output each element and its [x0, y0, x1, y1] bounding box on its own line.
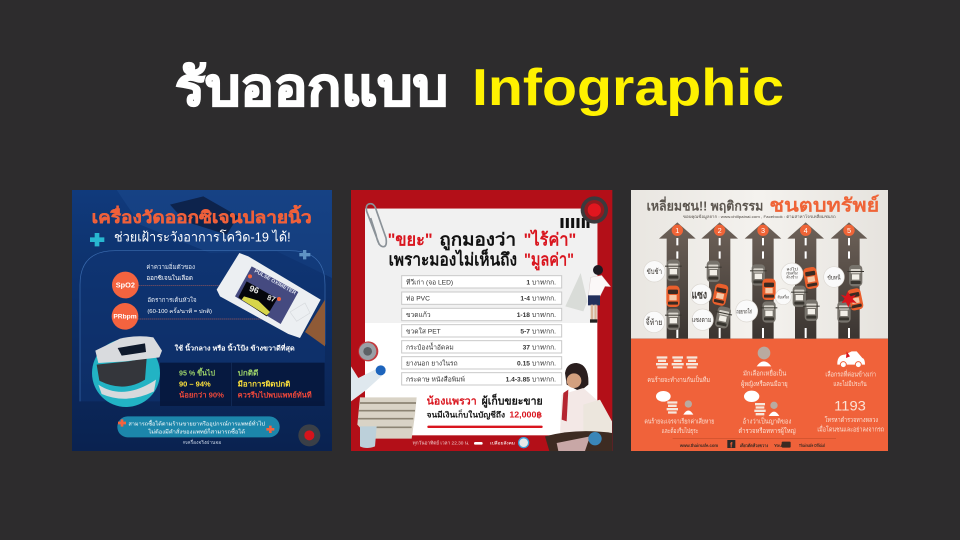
panel heading: "ขยะ" — [388, 229, 433, 249]
callout: PRbpm: อัตราการเต้นหัวใจ — [147, 296, 197, 304]
icon: paperclip — [366, 204, 386, 247]
text: choose women or elderly — [741, 369, 788, 388]
callout: girl saving: น้องแพรวา — [427, 395, 477, 408]
text: claims relatives: อ้างว่าเป็นญาติของ — [743, 417, 791, 426]
callout: girl saving: 12,000฿ — [509, 410, 542, 419]
footer: credits: f — [730, 440, 733, 449]
illustration: boy with trash bag — [565, 265, 611, 323]
background hand photo — [117, 190, 332, 278]
panel heading — [647, 194, 879, 220]
panel heading: เครื่องวัดออกซิเจนปลายนิ้ว — [92, 205, 312, 227]
icon: bubble with officer — [744, 391, 779, 416]
callout: PRbpm: PRbpm — [113, 314, 137, 321]
table: oxygen levels: ควรรีบไปพบแพทย์ทันที — [238, 391, 312, 400]
bubble labels: จี้ท้าย — [645, 316, 662, 327]
table: recycling prices: ทีวีเก่า (จอ LED) — [406, 278, 453, 286]
footer: credits — [673, 438, 836, 449]
illustration: girl collecting — [545, 363, 612, 451]
icon: pulse oximeter small with teal circle — [92, 336, 162, 407]
callout: girl saving — [427, 394, 543, 428]
callout: SpO2: SpO2 — [116, 281, 135, 290]
panel: pulse oximeter infographic — [72, 190, 332, 451]
note pill: สามารถซื้อได้ตามร้านขายยาหรืออุปกรณ์การแพทย์ทั่วไป — [128, 419, 266, 427]
icon group: three people — [656, 356, 698, 368]
text: demand compensation: และต้องรีบไปธุระ — [662, 427, 698, 435]
bubble labels — [645, 266, 841, 327]
table: recycling prices: 0.15 บาท/กก. — [517, 360, 556, 367]
text: usage: ใช้ นิ้วกลาง หรือ นิ้วโป้ง ข้างขวาดีที่สุด — [175, 342, 295, 352]
table: recycling prices: 5-7 บาท/กก. — [520, 328, 556, 335]
table: recycling prices: 1 บาท/กก. — [526, 279, 556, 286]
bubble labels: ลงไป — [786, 266, 798, 271]
bubble labels: แซง — [692, 290, 707, 302]
bubble labels: ดับเครื่อง — [778, 294, 789, 300]
hashtag: #เครื่องจริงผ่านจอ — [183, 439, 221, 446]
footer: broadcast info: ทุกวันอาทิตย์ เวลา 22.30 น. — [413, 440, 469, 447]
footer: broadcast info — [413, 438, 529, 448]
icon: pulse oximeter large — [217, 253, 321, 338]
text: demand compensation: คนร้ายจะเจรจาเรียกค่าเสียหาย — [644, 418, 714, 426]
illustration: newspaper stack — [357, 397, 417, 448]
note pill — [117, 416, 280, 437]
table: recycling prices: กระดาษ หนังสือพิมพ์ — [406, 375, 465, 383]
panel: waste value infographic — [351, 190, 612, 451]
bubble labels: เช่นเครื่อง — [786, 270, 798, 275]
footer: credits: www.thairsafe.com — [679, 443, 718, 448]
text: call highway police: เมื่อโดนชนและอย่าลงจากรถ — [817, 424, 884, 433]
footer: broadcast info: เปลือยสังคม — [490, 441, 515, 446]
arrow road 3: 3 — [761, 226, 765, 235]
arrow road 4 — [787, 222, 824, 339]
arrow road 2 — [701, 222, 738, 339]
panel heading: "ไร้ค่า" — [524, 228, 576, 249]
panel heading: ขอบคุณข้อมูลจาก : www.chillpainai.com , Facebook : ตามล่าหาโจรเหลี่ยมชนรถ — [683, 214, 836, 220]
text: call highway police — [817, 416, 884, 433]
bubble labels: แซงตาม — [692, 317, 711, 324]
panel heading — [92, 205, 312, 244]
text: choose old uninsured car: และไม่มีประกัน — [833, 380, 867, 388]
speech bubbles — [643, 261, 844, 333]
bubble labels: ค้างข้าง — [786, 274, 798, 279]
text: claims relatives — [738, 417, 796, 435]
table: recycling prices: ท่อ PVC — [406, 296, 430, 303]
panel heading: ถูกมองว่า — [439, 229, 516, 251]
arrow road 2: 2 — [718, 226, 722, 235]
table: oxygen levels: ปกติดี — [238, 369, 259, 378]
icon: plus — [90, 233, 104, 246]
title: รับออกแบบ — [175, 59, 448, 117]
icon: bubble with people — [656, 391, 693, 415]
callout: SpO2: ออกซิเจนในเลือด — [146, 274, 193, 282]
table: oxygen levels: 95 % ขึ้นไป — [179, 367, 215, 378]
icon: record button — [562, 196, 608, 228]
panel heading: "มูลค่า" — [524, 250, 574, 272]
footer: credits: เดียวตัดห้วยขวาง — [740, 442, 768, 448]
table: recycling prices: ขวดใส PET — [406, 327, 441, 335]
title — [175, 59, 784, 117]
text: works as a team: คนร้ายจะทำงานกันเป็นทีม — [647, 375, 710, 384]
text: call highway police: โทรหาตำรวจทางหลวง — [825, 416, 878, 424]
table: recycling prices: กระป๋องน้ำอัดลม — [406, 342, 454, 351]
icon: crash burst — [841, 291, 857, 307]
icon: small plus — [299, 250, 310, 259]
number: 1193: 1193 — [834, 397, 866, 413]
white card — [365, 209, 597, 435]
text: choose women or elderly: มักเลือกเหยื่อเป็น — [743, 369, 787, 378]
panel heading — [388, 228, 576, 272]
panel: car scam infographic — [631, 190, 888, 451]
icon: record button — [298, 424, 320, 446]
callout: girl saving: ผู้เก็บขยะขาย — [482, 394, 543, 409]
illustration: can and bottle — [351, 341, 386, 401]
footer: credits: Thairsafe Official — [799, 443, 825, 448]
table: oxygen levels: มีอาการผิดปกติ — [237, 380, 291, 389]
icon: woman — [757, 347, 771, 366]
table: oxygen levels: น้อยกว่า 90% — [179, 391, 225, 400]
footer: credits: You — [774, 443, 782, 448]
note pill: ไม่ต้องมีคำสั่งของแพทย์ก็สามารถซื้อได้ — [147, 427, 246, 435]
table: recycling prices: 1-4 บาท/กก. — [520, 296, 556, 303]
callout: SpO2 — [112, 262, 250, 298]
table: oxygen levels: 90 – 94% — [179, 380, 211, 389]
callout: PRbpm: (60-100 ครั้ง/นาที = ปกติ) — [147, 307, 212, 315]
icon: damaged car — [837, 351, 865, 368]
arrow road 4: 4 — [804, 226, 808, 235]
title: Infographic — [472, 59, 784, 117]
table: recycling prices: ยางนอก ยางในรถ — [406, 359, 458, 367]
arrow road 5: 5 — [847, 226, 851, 235]
text: demand compensation — [644, 418, 714, 435]
finger — [305, 300, 325, 346]
icon: pulse oximeter large: 96 — [248, 283, 261, 296]
bubble labels: ขับหนี — [827, 273, 841, 281]
panel heading: เพราะมองไม่เห็นถึง — [389, 248, 517, 270]
icon: pulse oximeter large: PULSE OXIMETER — [253, 269, 297, 297]
arrow road 1 — [659, 222, 696, 339]
text: choose old uninsured car — [825, 370, 876, 388]
arrow road 3 — [745, 222, 781, 339]
panel heading: เหลี่ยมชน!! พฤติกรรม — [647, 195, 763, 213]
arrow road 1: 1 — [675, 226, 679, 235]
icon: pulse oximeter large: 87 — [266, 293, 277, 304]
panel heading: ชนตบทรัพย์ — [769, 194, 879, 215]
arrow road 5 — [831, 222, 867, 339]
text: claims relatives: ตำรวจหรือทหารผู้ใหญ่ — [738, 427, 796, 435]
cars on roads — [665, 260, 864, 330]
bubble labels: ถอยรถใส่ — [736, 307, 752, 315]
table: recycling prices — [402, 276, 562, 385]
bubble labels: ขับช้า — [647, 267, 662, 276]
table: recycling prices: 37 บาท/กก. — [523, 344, 556, 351]
rounded content frame — [80, 251, 325, 401]
callout: PRbpm — [112, 296, 277, 330]
callout: girl saving: จนมีเงินเก็บในบัญชีถึง — [427, 408, 505, 420]
callout: SpO2: ค่าความอิ่มตัวของ — [146, 262, 195, 271]
text: choose women or elderly: ผู้หญิงหรือคนมีอายุ — [741, 380, 788, 388]
table: recycling prices: 1.4-3.85 บาท/กก. — [506, 376, 556, 383]
table: recycling prices: 1-18 บาท/กก. — [517, 312, 556, 319]
panel heading: ช่วยเฝ้าระวังอาการโควิด-19 ได้! — [114, 229, 291, 244]
text: choose old uninsured car: เลือกรถที่ค่อนข้างเก่า — [825, 370, 876, 379]
table: recycling prices: ขวดแก้ว — [406, 311, 431, 319]
table: oxygen levels — [160, 363, 325, 406]
